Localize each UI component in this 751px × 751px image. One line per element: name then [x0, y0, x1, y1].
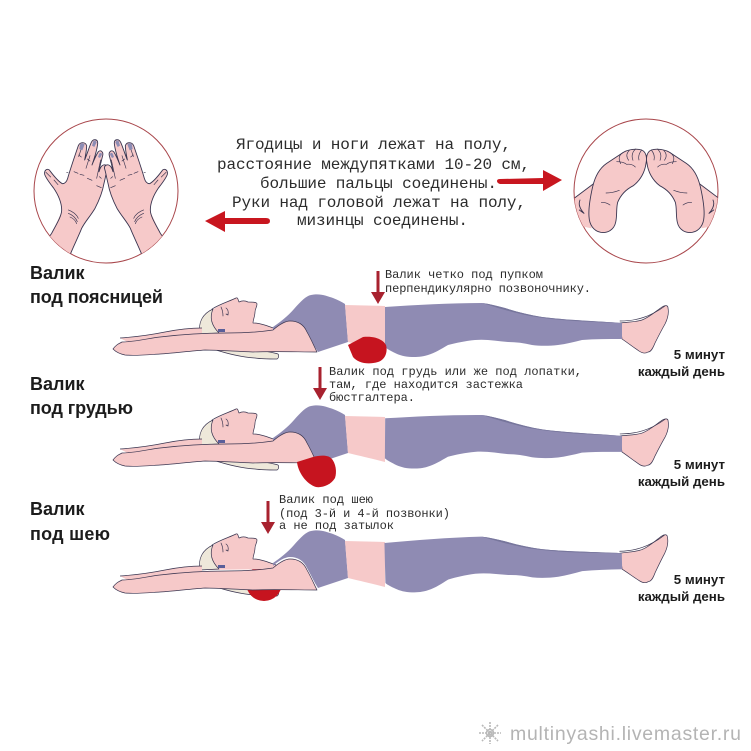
callout: roller under neck	[279, 493, 450, 533]
heading: roller under chest	[30, 374, 133, 418]
duration label 3: 5 минут	[674, 572, 725, 587]
main instructions text: мизинцы соединены.	[297, 212, 468, 230]
callout: roller under neck: (под 3-й и 4-й позвонки)	[279, 507, 450, 521]
duration label 1: 5 минут	[674, 347, 725, 362]
arrow: down to navel	[371, 271, 385, 304]
figure 3: woman with roller under neck	[113, 530, 669, 601]
arrow: to hands circle	[205, 211, 270, 232]
heading: roller under lower back: под поясницей	[30, 287, 163, 307]
main instructions text	[217, 136, 530, 230]
callout: roller under chest	[329, 365, 582, 405]
panel: hands circle	[34, 119, 178, 263]
infographic canvas	[31, 118, 740, 744]
arrow: to feet circle	[497, 170, 562, 191]
figure 2: woman with roller under chest	[113, 405, 669, 487]
arrow: down to neck	[261, 501, 275, 534]
duration label 1	[638, 347, 725, 379]
duration label 2	[638, 457, 725, 489]
heading: roller under lower back	[30, 263, 163, 307]
duration label 3: каждый день	[638, 589, 725, 604]
callout: roller under chest: Валик под грудь или же под лопатки,	[329, 365, 582, 379]
duration label 2: 5 минут	[674, 457, 725, 472]
watermark text: multinyashi.livemaster.ru	[510, 723, 741, 745]
heading: roller under neck	[30, 499, 110, 544]
callout: roller under navel: перпендикулярно позвоночнику.	[385, 282, 591, 296]
icon: left hand	[45, 140, 108, 255]
icon: left foot	[573, 149, 646, 233]
callout: roller under neck: а не под затылок	[279, 519, 394, 533]
icon: watermark snowflake	[479, 722, 501, 744]
figure 1: woman with roller under lower back	[113, 294, 668, 363]
duration label 2: каждый день	[638, 474, 725, 489]
heading: roller under chest: под грудью	[30, 398, 133, 418]
callout: roller under navel	[385, 268, 591, 296]
roller under neck	[246, 565, 282, 601]
roller under lower back	[348, 337, 387, 363]
callout: roller under navel: Валик четко под пупком	[385, 268, 543, 282]
callout: roller under chest: бюстгалтера.	[329, 391, 415, 405]
heading: roller under neck: под шею	[30, 524, 110, 544]
icon: right foot	[647, 149, 720, 233]
callout: roller under neck: Валик под шею	[279, 493, 373, 507]
heading: roller under lower back: Валик	[30, 263, 86, 283]
heading: roller under chest: Валик	[30, 374, 86, 394]
icon: right hand	[104, 140, 167, 255]
roller under chest	[297, 456, 336, 487]
callout: roller under chest: там, где находится застежка	[329, 378, 523, 392]
duration label 3	[638, 572, 725, 604]
panel: feet circle	[573, 119, 720, 263]
main instructions text: расстояние междупятками 10-20 см,	[217, 156, 530, 174]
main instructions text: Ягодицы и ноги лежат на полу,	[236, 136, 511, 154]
main instructions text: Руки над головой лежат на полу,	[232, 194, 526, 212]
arrow: down to chest	[313, 367, 327, 400]
heading: roller under neck: Валик	[30, 499, 86, 519]
duration label 1: каждый день	[638, 364, 725, 379]
main instructions text: большие пальцы соединены.	[260, 175, 497, 193]
